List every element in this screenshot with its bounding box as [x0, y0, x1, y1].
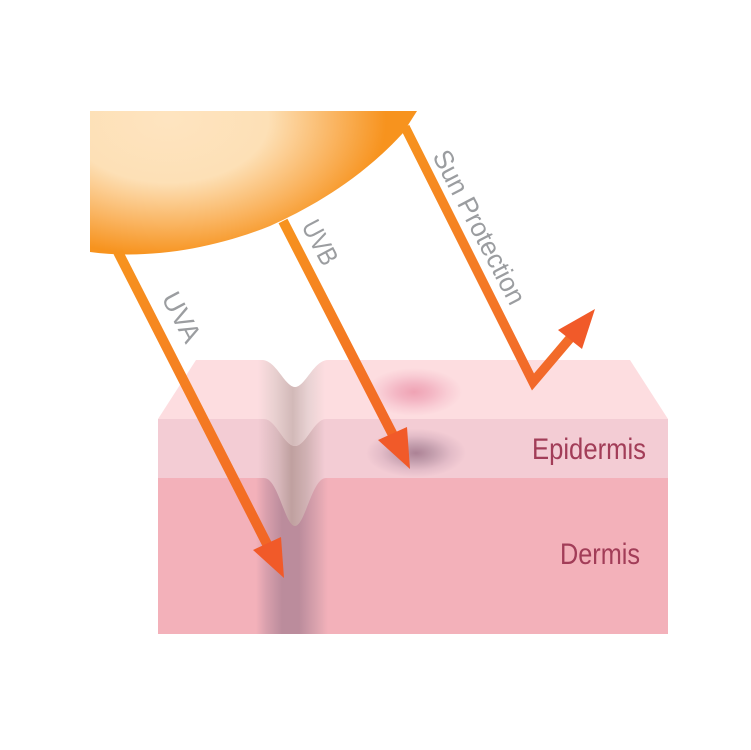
label: Sun Protection: Sun Protection: [427, 145, 532, 310]
dermis shadow band: [256, 478, 328, 634]
skin surface: [158, 360, 668, 419]
label: Dermis: Dermis: [560, 538, 640, 571]
sunburn spot: [366, 368, 462, 416]
sun: [90, 111, 417, 254]
dermis layer: [158, 478, 668, 634]
label: UVB: UVB: [296, 215, 344, 270]
arrow: UVA: [118, 252, 284, 578]
epidermis layer: [158, 419, 668, 478]
epidermis indentation: [258, 419, 326, 526]
label: Epidermis: Epidermis: [532, 433, 646, 466]
skin block: [158, 359, 668, 634]
surface notch: [262, 359, 328, 387]
dark spot: [366, 428, 466, 478]
arrow: Sun Protection: [405, 127, 595, 382]
label: UVA: UVA: [156, 287, 207, 348]
arrow: UVB: [283, 221, 410, 469]
surface indentation: [258, 360, 326, 446]
